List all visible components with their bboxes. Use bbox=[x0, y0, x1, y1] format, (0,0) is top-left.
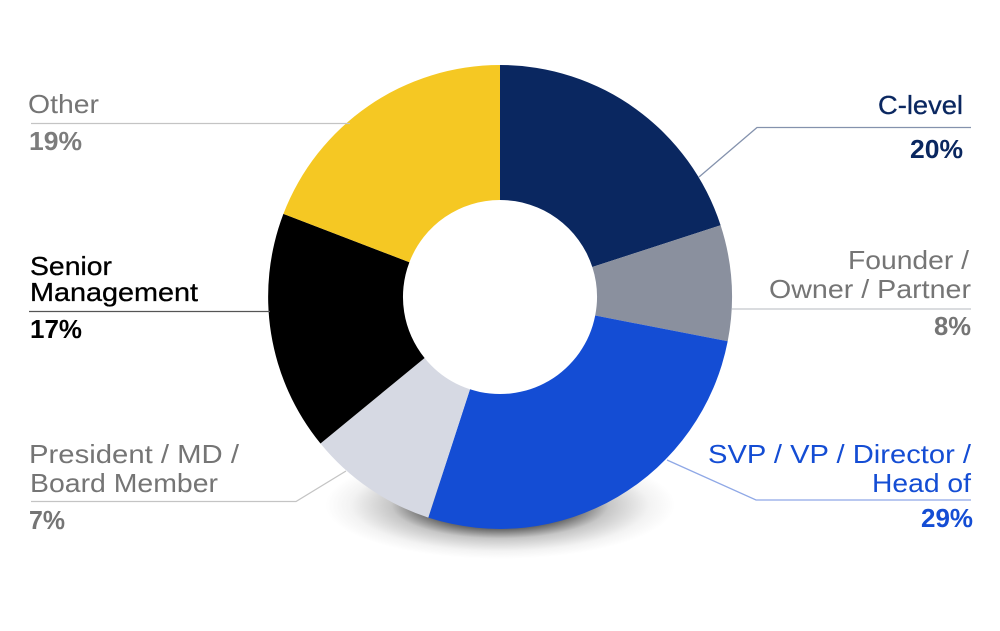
label: President / MD / Board Member 7%: 7% bbox=[29, 505, 65, 535]
label: C-level 20%: C-level bbox=[878, 90, 963, 120]
segment: Founder / Owner / Partner 8% bbox=[592, 225, 732, 341]
label: President / MD / Board Member 7% bbox=[29, 439, 346, 535]
label: Founder / Owner / Partner 8% bbox=[732, 245, 971, 341]
segment: C-level 20% bbox=[500, 65, 721, 267]
label: Senior Management 17%: 17% bbox=[30, 314, 82, 344]
segment: SVP / VP / Director / Head of 29% bbox=[428, 316, 728, 529]
label: Senior Management 17%: Management bbox=[30, 277, 199, 307]
segment: President / MD / Board Member 7% bbox=[320, 358, 470, 518]
segment: Other 19% bbox=[283, 65, 500, 262]
label: SVP / VP / Director / Head of 29%: 29% bbox=[921, 503, 973, 533]
label: SVP / VP / Director / Head of 29% bbox=[667, 439, 973, 533]
donut chart bbox=[268, 65, 732, 529]
label: Founder / Owner / Partner 8%: 8% bbox=[934, 311, 971, 341]
label: C-level 20%: 20% bbox=[910, 134, 963, 164]
label: Senior Management 17%: Senior bbox=[30, 251, 112, 281]
drop shadow under donut bbox=[325, 451, 675, 559]
label: President / MD / Board Member 7%: President / MD / bbox=[29, 439, 240, 469]
label: Other 19%: 19% bbox=[29, 126, 82, 156]
label: C-level 20% bbox=[699, 90, 971, 177]
label: President / MD / Board Member 7%: Board Member bbox=[30, 468, 218, 498]
label: Other 19% bbox=[28, 89, 350, 156]
label: Other 19%: Other bbox=[28, 89, 99, 119]
label: SVP / VP / Director / Head of 29%: SVP / VP / Director / bbox=[708, 439, 972, 469]
label: Senior Management 17% bbox=[29, 251, 270, 344]
label: SVP / VP / Director / Head of 29%: Head of bbox=[872, 468, 972, 498]
label: Founder / Owner / Partner 8%: Owner / Partner bbox=[769, 274, 971, 304]
segment: Senior Management 17% bbox=[268, 214, 425, 444]
label: Founder / Owner / Partner 8%: Founder / bbox=[848, 245, 970, 275]
